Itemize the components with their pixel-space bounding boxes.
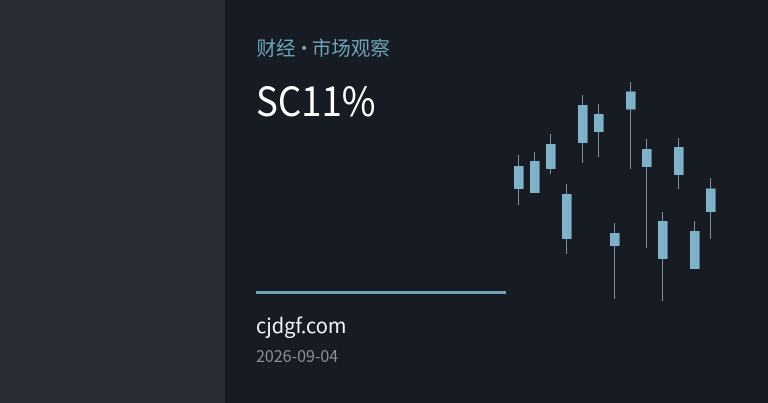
accent rule xyxy=(256,291,506,294)
date: 2026-09-04 xyxy=(256,343,338,367)
panel: left sidebar xyxy=(0,0,225,403)
candlestick chart xyxy=(514,82,716,301)
category heading: 财经 · 市场观察 xyxy=(256,32,390,61)
title: SC11% xyxy=(256,70,376,128)
site name: cjdgf.com xyxy=(256,310,346,339)
